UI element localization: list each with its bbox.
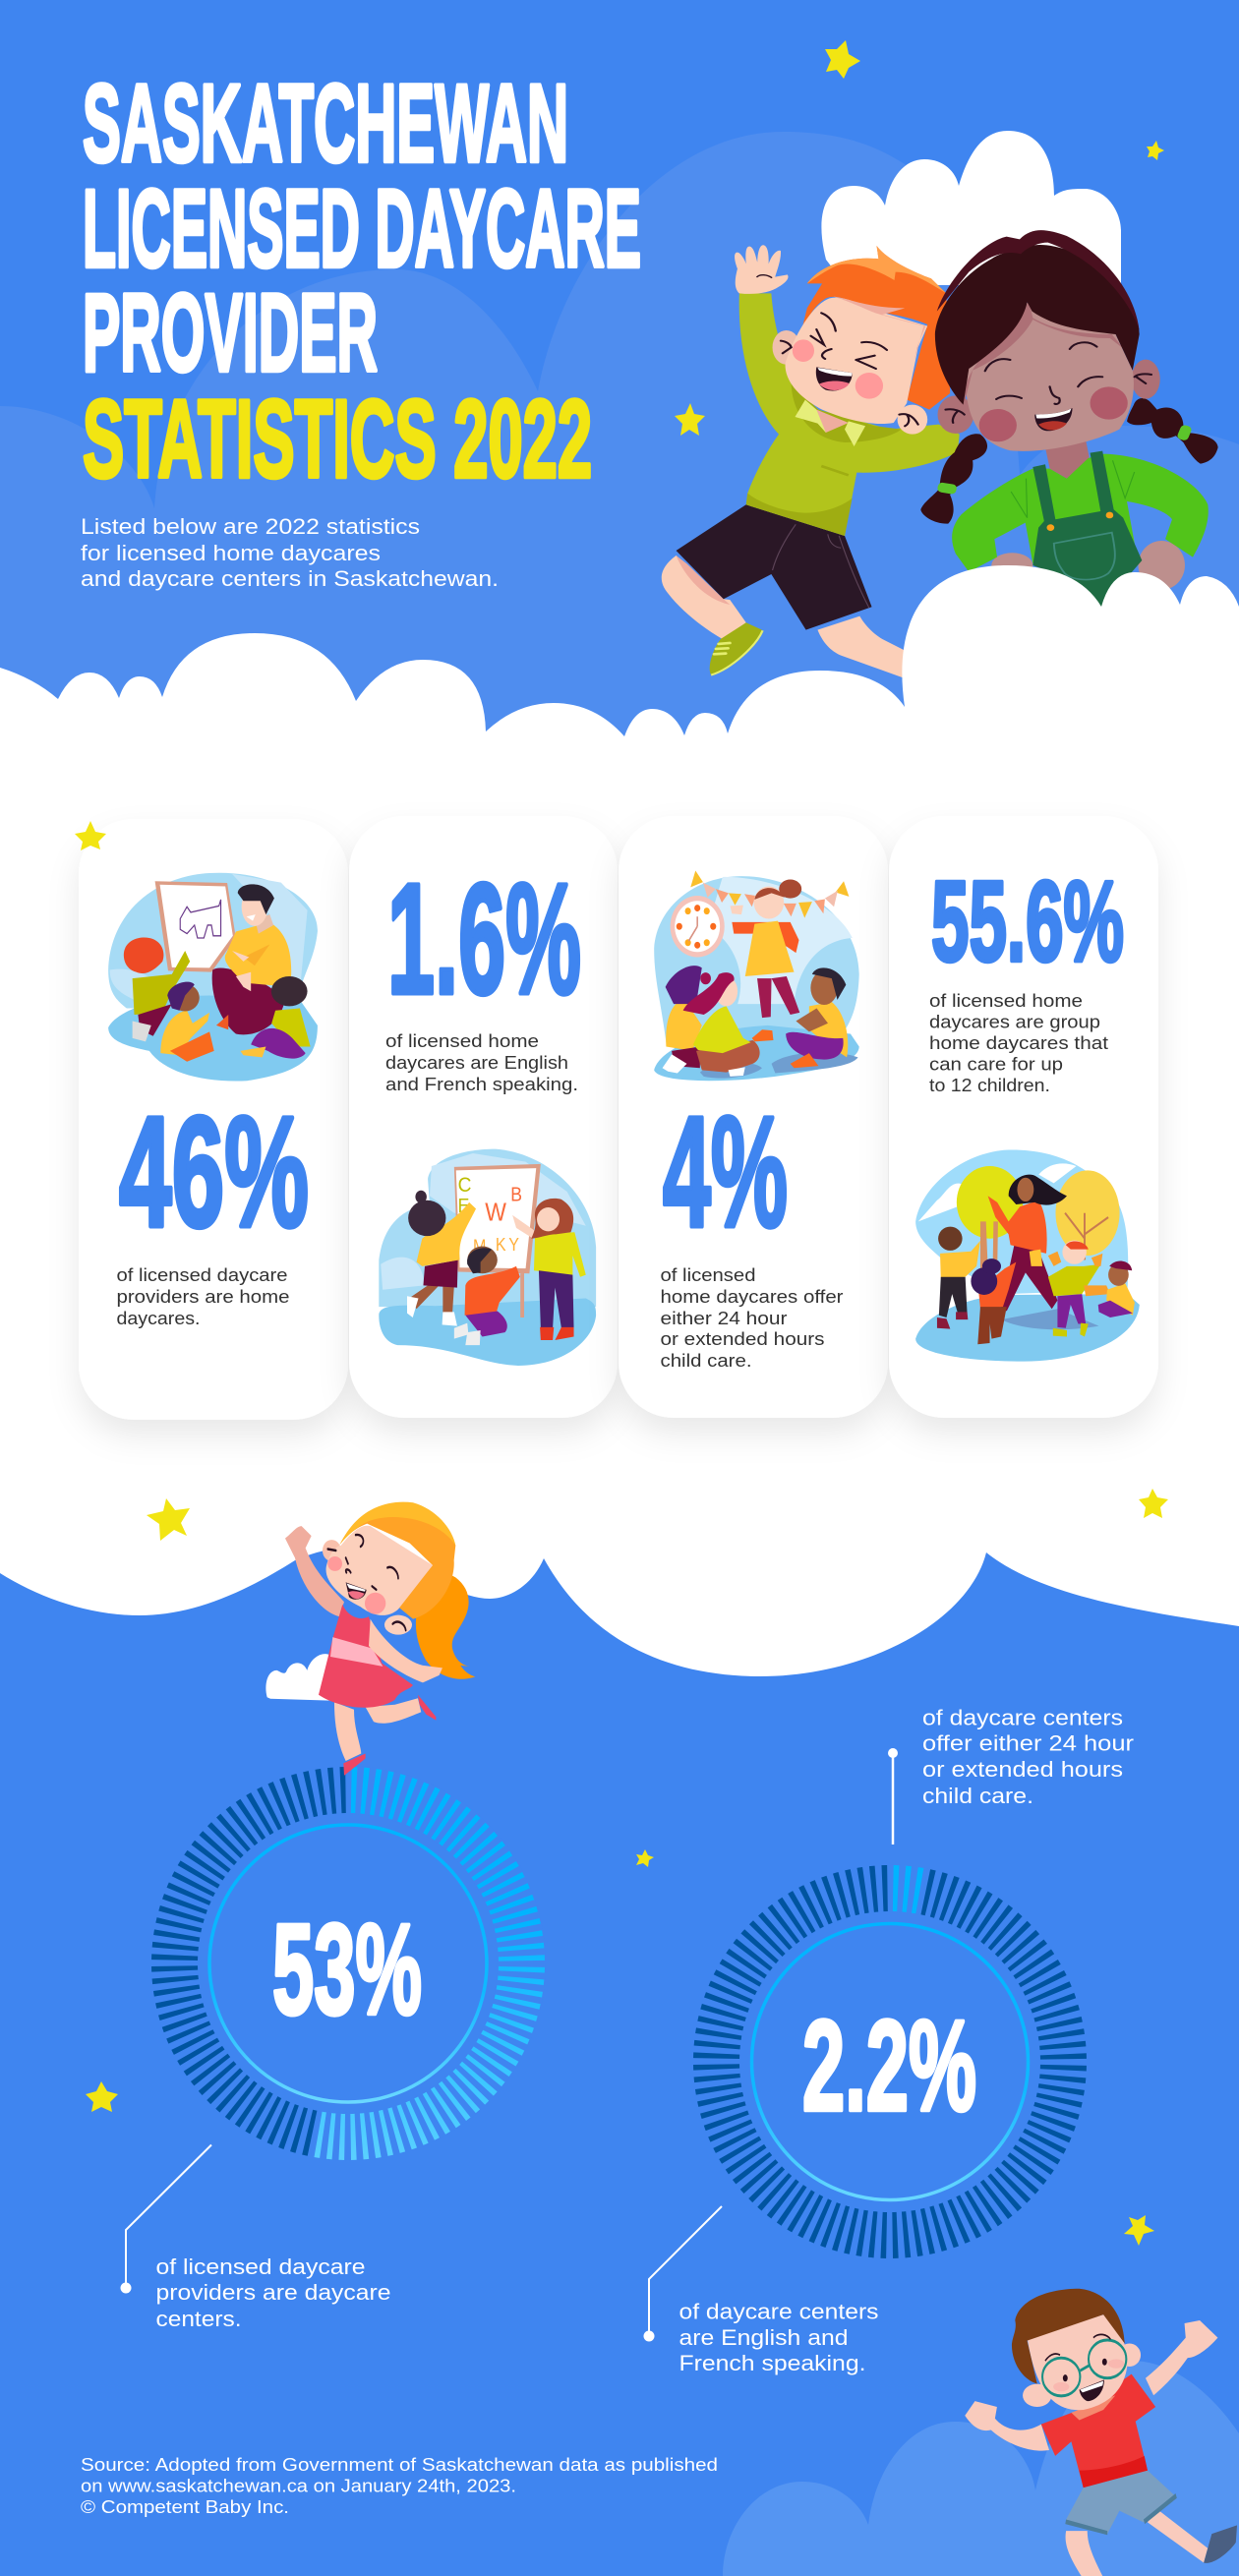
text: centers bilingual: of daycare centers [678, 2299, 879, 2324]
title [83, 62, 641, 500]
text: centers 24 hour [922, 1705, 1134, 1808]
big number 1.6%: 1.6% [387, 850, 581, 1026]
illustration: girl with clock and kids [654, 870, 859, 1081]
illustration: children at alphabet board: B [510, 1184, 522, 1205]
text: centers bilingual: are English and [678, 2325, 848, 2350]
illustration: children at alphabet board: E [458, 1195, 469, 1216]
panel: card 1.6% [349, 816, 618, 1418]
text: centers 24 hour: of daycare centers [922, 1705, 1123, 1730]
description [661, 1264, 844, 1371]
illustration: teacher with kids [108, 873, 318, 1082]
description: home daycares offer [661, 1286, 844, 1307]
star centre [636, 1849, 654, 1867]
big number 4%: 4% [663, 1083, 788, 1259]
panel: card 55.6% [889, 816, 1158, 1418]
star top right [1147, 141, 1164, 160]
text: centers bilingual [678, 2299, 879, 2375]
text: centers 24 hour: or extended hours [922, 1757, 1123, 1782]
title: SASKATCHEWAN [83, 62, 568, 185]
description: daycares are English [385, 1052, 568, 1073]
source: on www.saskatchewan.ca on January 24th, 2023. [81, 2476, 516, 2495]
description: either 24 hour [661, 1308, 787, 1328]
illustration: children at alphabet board: C [458, 1173, 471, 1197]
leader line: bilingual centers [643, 2206, 722, 2342]
description: daycares are group [929, 1011, 1100, 1032]
text: licensed providers centers: providers are daycare [155, 2280, 391, 2305]
intro text: for licensed home daycares [81, 541, 381, 565]
text: licensed providers centers [155, 2254, 391, 2331]
girl [920, 230, 1218, 608]
panel: card 46% [79, 819, 348, 1420]
illustration: teacher and kids in park [915, 1149, 1140, 1362]
star bottom left of band [147, 1498, 190, 1541]
illustration: children at alphabet board: M [473, 1236, 486, 1257]
illustration: children at alphabet board [379, 1149, 596, 1366]
description [385, 1030, 578, 1094]
big number 46%: 46% [119, 1083, 309, 1259]
description [116, 1264, 289, 1328]
star right of band [1139, 1489, 1168, 1518]
text: centers 24 hour: child care. [922, 1784, 1033, 1808]
description: home daycares that [929, 1032, 1108, 1053]
panel: card 4% [619, 816, 888, 1418]
description: or extended hours [661, 1328, 824, 1349]
text: LICENSED DAYCARE [83, 167, 641, 290]
ring chart: 2.2% [716, 1888, 1063, 2236]
source [81, 2454, 718, 2517]
value 53%: 53% [272, 1897, 422, 2041]
description: of licensed home [385, 1030, 539, 1051]
ring chart: 53% [174, 1789, 521, 2137]
description: to 12 children. [929, 1075, 1050, 1095]
intro text [81, 514, 499, 591]
description [929, 990, 1108, 1095]
description: child care. [661, 1350, 751, 1371]
intro text: and daycare centers in Saskatchewan. [81, 566, 499, 591]
text: licensed providers centers: centers. [155, 2307, 242, 2331]
title: PROVIDER [83, 271, 378, 394]
text: centers 24 hour: offer either 24 hour [922, 1730, 1134, 1756]
description: of licensed home [929, 990, 1083, 1011]
star by boy [675, 403, 705, 436]
leader line: 53% [120, 2145, 211, 2293]
card star [75, 821, 106, 850]
text: licensed providers centers: of licensed daycare [155, 2254, 366, 2279]
star lower right [1124, 2215, 1154, 2246]
background clouds: top [0, 132, 1239, 787]
illustration: boy and girl jumping [662, 230, 1218, 678]
description: providers are home [116, 1286, 289, 1307]
description: and French speaking. [385, 1074, 578, 1094]
illustration: children at alphabet board: Y [508, 1234, 520, 1255]
boy [662, 245, 960, 678]
text: centers bilingual: French speaking. [678, 2351, 865, 2375]
leader line: 24 hour centers [888, 1748, 898, 1844]
illustration: boy with glasses [965, 2289, 1237, 2576]
star lower left [86, 2081, 118, 2112]
illustration: girl with small cloud [266, 1502, 475, 1776]
background clouds: bottom right [723, 2361, 1239, 2576]
description: of licensed daycare [116, 1264, 287, 1285]
star top [825, 40, 860, 79]
description: of licensed [661, 1264, 755, 1285]
source: Source: Adopted from Government of Saskatchewan data as published [81, 2454, 718, 2475]
illustration: children at alphabet board: K [496, 1234, 506, 1255]
description: can care for up [929, 1054, 1063, 1074]
source: © Competent Baby Inc. [81, 2496, 289, 2517]
back cloud behind children [821, 131, 1121, 285]
value 2.2%: 2.2% [802, 1993, 976, 2137]
description: daycares. [116, 1308, 201, 1328]
intro text: Listed below are 2022 statistics [81, 514, 420, 539]
illustration: children at alphabet board: W [485, 1199, 507, 1227]
title: STATISTICS 2022 [83, 378, 592, 500]
white cloud band [0, 565, 1239, 1676]
